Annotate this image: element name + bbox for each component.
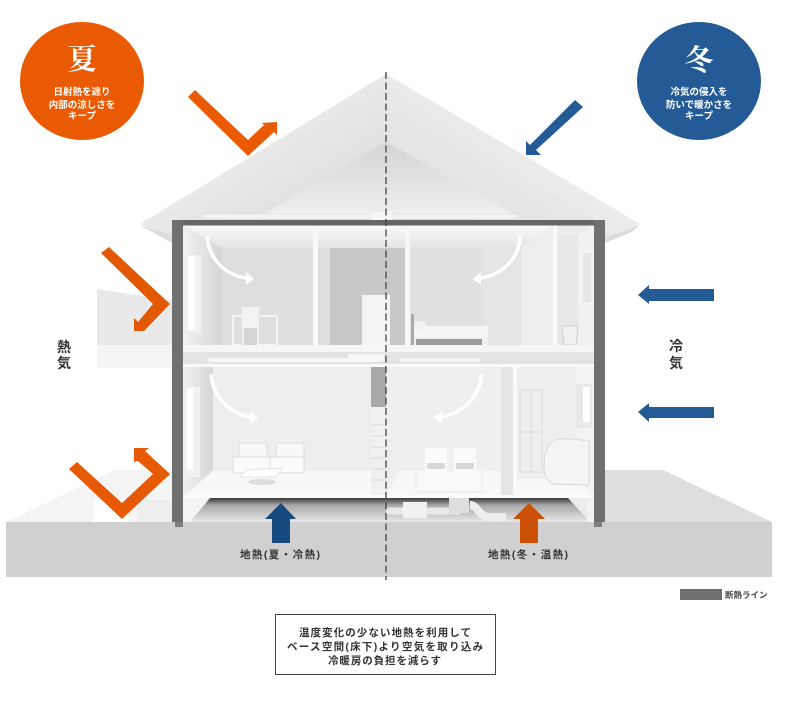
arrow: cold air lower	[638, 403, 714, 422]
airflow lower right	[435, 374, 481, 423]
note box: 温度変化の少ない地熱を利用して	[299, 626, 471, 639]
house roof	[140, 74, 640, 240]
arrow: cold air upper	[638, 285, 714, 304]
airflow upper left	[207, 236, 253, 284]
attic duct	[203, 212, 517, 220]
label: hot air: 熱	[57, 339, 71, 355]
arrow: roof reflected heat	[188, 90, 277, 156]
label: cold air: 気	[669, 355, 683, 371]
summer description: 内部の涼しさを	[49, 99, 115, 111]
insulation line frame	[172, 220, 605, 527]
stairs	[371, 367, 386, 495]
upper right room	[405, 225, 594, 345]
label: hot air: 気	[57, 355, 71, 371]
summer description: キープ	[68, 111, 96, 122]
label: cold air	[669, 338, 683, 371]
balcony on the left	[92, 289, 172, 522]
vase	[562, 326, 578, 345]
upper centre room	[318, 225, 410, 345]
label: hot air	[57, 339, 71, 371]
upper left dining set	[233, 307, 277, 345]
winter description: キープ	[685, 111, 713, 122]
floor slab and duct between floors	[183, 345, 595, 367]
note box: ベース空間(床下)より空気を取り込み	[287, 640, 484, 653]
winter badge	[637, 22, 761, 140]
winter description: 防いで暖かさを	[666, 99, 732, 111]
label: summer ground heat: 地熱(夏・冷熱)	[240, 548, 320, 561]
arrow: wall reflected heat upper	[101, 247, 170, 331]
airflow upper right	[474, 236, 520, 284]
house interior	[183, 225, 595, 522]
summer title: 夏	[67, 43, 97, 76]
underfloor space	[183, 498, 595, 522]
ground	[6, 470, 772, 577]
note box: 冷暖房の負担を減らす	[328, 654, 441, 667]
arrow: ground cold up	[265, 503, 296, 543]
water heater	[544, 439, 589, 485]
centre dashed divider	[385, 72, 387, 580]
label: cold air: 冷	[669, 338, 683, 354]
arrow: winter roof cold	[526, 100, 583, 155]
winter description: 冷気の侵入を	[670, 86, 728, 98]
label: winter ground heat: 地熱(冬・温熱)	[488, 548, 568, 561]
legend: insulation line	[680, 589, 768, 600]
dining set lower right	[416, 448, 482, 492]
note box	[276, 614, 496, 674]
bed	[411, 314, 488, 345]
sofa set	[233, 443, 304, 485]
arrow: ground warm up	[513, 503, 545, 543]
legend: insulation line: 断熱ライン	[725, 590, 768, 600]
winter description	[666, 86, 732, 122]
lower left room	[183, 367, 386, 497]
lower right room	[386, 367, 595, 495]
underfloor duct	[386, 498, 506, 518]
summer badge	[20, 22, 144, 140]
summer description: 日射熱を遮り	[53, 86, 111, 98]
eaves	[140, 225, 640, 243]
winter title: 冬	[684, 44, 714, 77]
upper left room	[183, 225, 330, 345]
airflow lower left	[211, 374, 257, 423]
base floor slab	[183, 495, 595, 498]
summer description	[49, 86, 115, 122]
white airflow arrows	[207, 236, 520, 423]
arrow: wall reflected heat lower	[69, 448, 170, 519]
